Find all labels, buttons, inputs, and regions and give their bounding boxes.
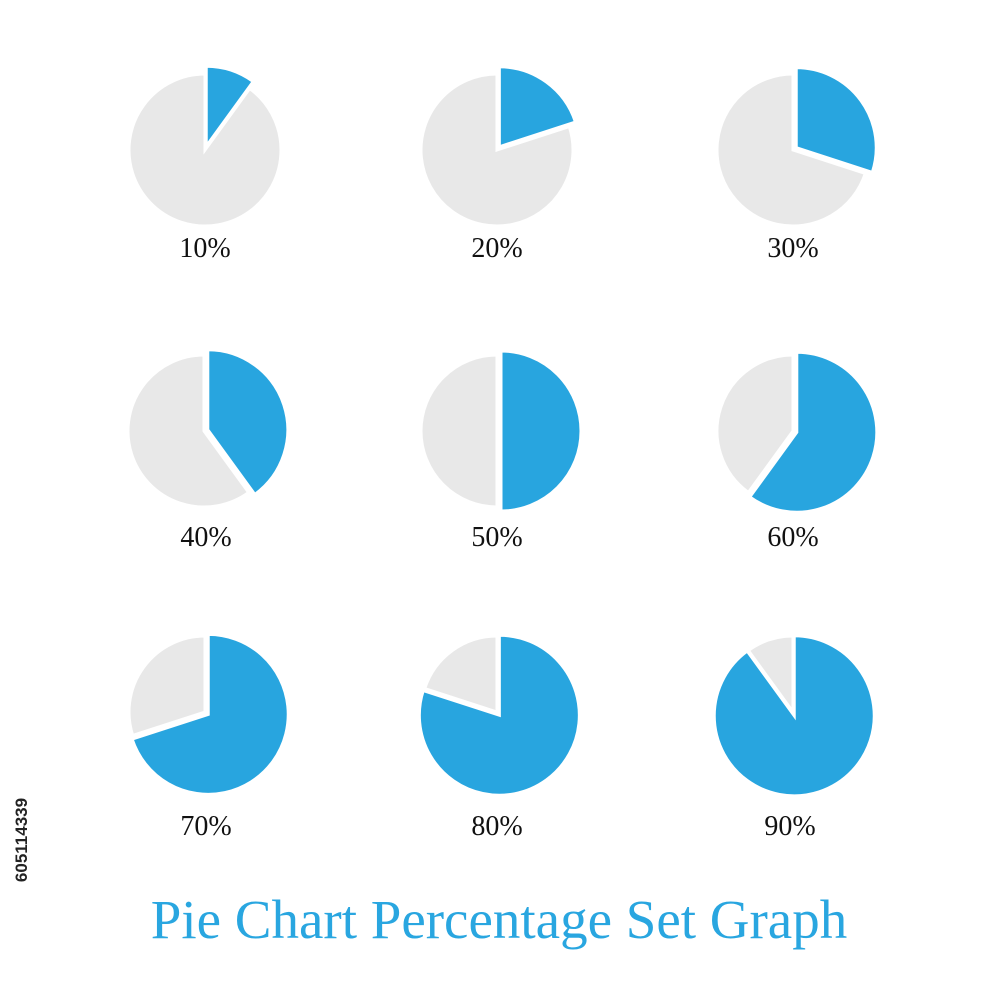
labels: 50% xyxy=(471,522,523,553)
labels: 20% xyxy=(471,233,523,264)
pie: 70% xyxy=(129,634,288,794)
side id text: 605114339 xyxy=(12,798,31,882)
labels: 40% xyxy=(180,522,232,553)
pie: 30% xyxy=(717,68,876,226)
labels: 10% xyxy=(179,233,231,264)
labels xyxy=(179,233,819,842)
labels: 70% xyxy=(180,811,232,842)
pie: 60% xyxy=(717,352,877,512)
pie: 40% xyxy=(128,350,288,507)
pie: 50% xyxy=(421,351,581,511)
pie: 80% xyxy=(419,635,579,795)
labels: 60% xyxy=(767,522,819,553)
pie: 20% xyxy=(421,67,575,226)
pie: 10% xyxy=(129,66,281,226)
pie: 90% xyxy=(714,636,874,796)
labels: 90% xyxy=(764,811,816,842)
title: Pie Chart Percentage Set Graph xyxy=(151,889,847,950)
labels: 80% xyxy=(471,811,523,842)
labels: 30% xyxy=(767,233,819,264)
